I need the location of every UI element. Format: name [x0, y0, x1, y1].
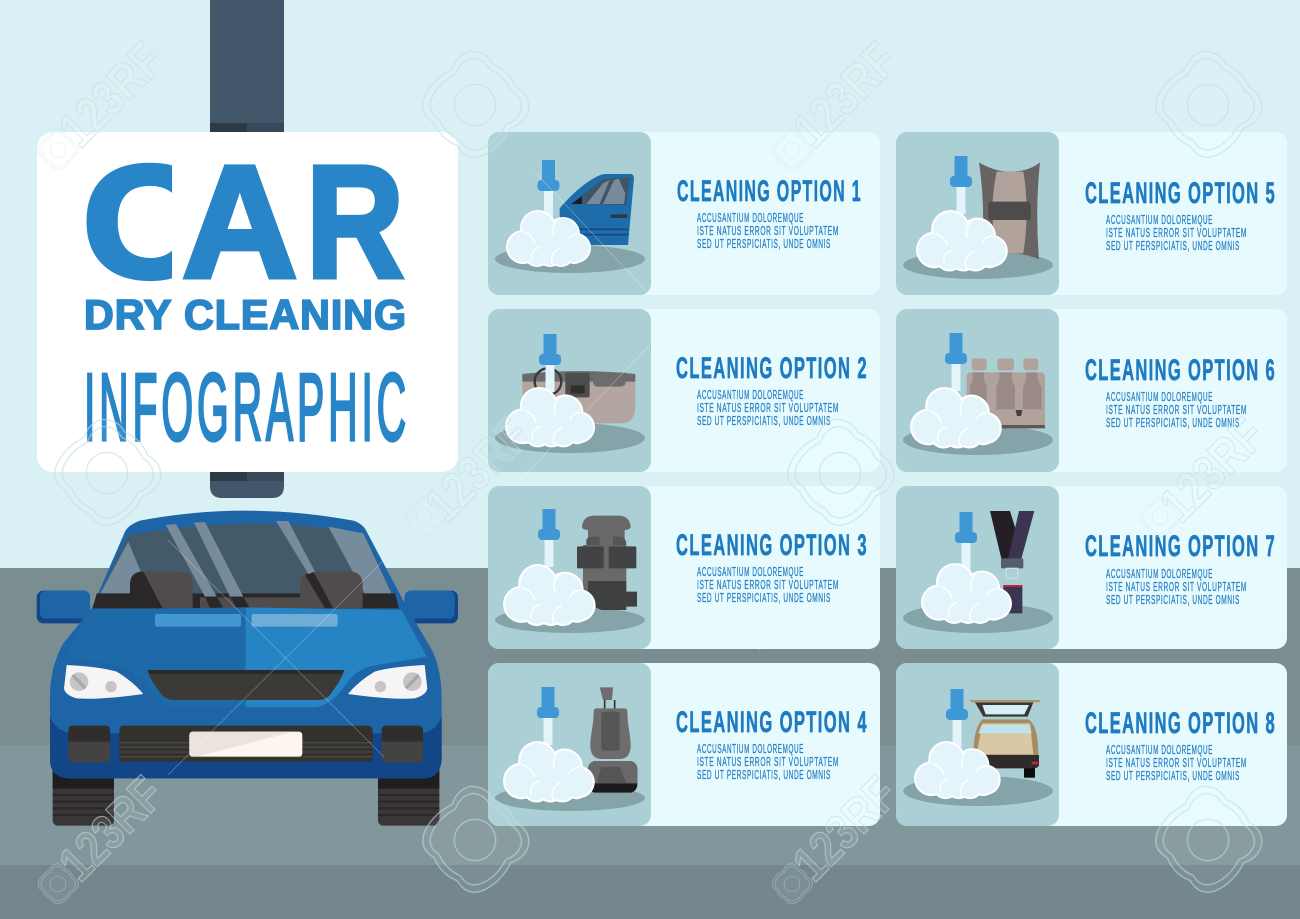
- body text: ACCUSANTIUM DOLOREMQUE: [697, 211, 804, 225]
- card: cleaning option 5: [896, 132, 1287, 295]
- body text: [697, 211, 839, 251]
- card: cleaning option 6: [896, 309, 1287, 472]
- icon: steam nozzle: [538, 160, 560, 218]
- body text: [1106, 390, 1247, 430]
- shadow: [903, 251, 1053, 279]
- subtitle: DRY CLEANING: DRY CLEANING: [84, 291, 407, 338]
- icon: seat parts: [577, 516, 637, 610]
- icon panel: [488, 132, 651, 295]
- shadow: [903, 776, 1053, 806]
- title: CAR: A: [182, 132, 298, 311]
- icon panel: [896, 132, 1059, 295]
- body text: SED UT PERSPICIATIS, UNDE OMNIS: [697, 768, 831, 782]
- card: cleaning option 3: [488, 486, 880, 649]
- body text: ACCUSANTIUM DOLOREMQUE: [697, 565, 804, 579]
- icon: rear seats: [967, 358, 1045, 428]
- heading: CLEANING OPTION 4: [676, 706, 868, 739]
- body text: SED UT PERSPICIATIS, UNDE OMNIS: [697, 591, 831, 605]
- icon panel: [488, 486, 651, 649]
- windshield: [93, 521, 399, 608]
- icon: foam cloud: [921, 563, 1012, 624]
- car front view: [37, 511, 458, 826]
- icon: open car trunk: [969, 700, 1041, 778]
- icon: foam cloud: [503, 564, 596, 626]
- watermark overlay: 123RF: [782, 32, 908, 158]
- body text: ISTE NATUS ERROR SIT VOLUPTATEM: [697, 401, 839, 415]
- icon: foam cloud: [914, 741, 1001, 799]
- grille: [148, 670, 344, 700]
- icon: dashboard: [522, 368, 635, 423]
- watermark overlay: 123RF: [782, 766, 908, 892]
- watermark overlay: 123RF: [414, 407, 540, 533]
- left mirror: [37, 591, 90, 623]
- shadow: [495, 245, 645, 273]
- icon: steam nozzle: [946, 689, 968, 747]
- hanging sign post: [210, 0, 284, 498]
- hood: [65, 607, 427, 707]
- card: cleaning option 8: [896, 663, 1287, 826]
- icon panel: [896, 663, 1059, 826]
- shadow: [903, 603, 1053, 633]
- icon: steam nozzle: [537, 687, 559, 745]
- body text: [697, 388, 839, 428]
- right fog lamp: [382, 726, 423, 762]
- title panel: [37, 132, 458, 472]
- body text: [1106, 213, 1247, 253]
- watermark overlay: 123RF: [1149, 407, 1275, 533]
- shadow: [495, 785, 645, 811]
- icon: steam nozzle: [538, 509, 560, 567]
- right headlight: [348, 665, 427, 699]
- heading: CLEANING OPTION 1: [677, 175, 862, 208]
- card: cleaning option 4: [488, 663, 880, 826]
- heading: CLEANING OPTION 2: [676, 352, 868, 385]
- lower grille: [119, 726, 373, 762]
- lower bumper: [50, 717, 442, 778]
- watermark overlay: 123RF: [48, 766, 174, 892]
- body text: ISTE NATUS ERROR SIT VOLUPTATEM: [697, 224, 839, 238]
- icon: steam nozzle: [955, 512, 977, 570]
- right mirror: [405, 591, 458, 623]
- title: CAR: C: [82, 132, 210, 311]
- title: CAR: [86, 162, 405, 282]
- body text: [697, 742, 839, 782]
- icon panel: [488, 663, 651, 826]
- car body: [50, 511, 442, 778]
- garage floor: [0, 568, 1300, 919]
- body text: ACCUSANTIUM DOLOREMQUE: [697, 388, 804, 402]
- card: cleaning option 7: [896, 486, 1287, 649]
- icon: seat belt: [990, 511, 1034, 613]
- left tire: [53, 763, 114, 826]
- body text: [1106, 567, 1247, 607]
- shadow: [495, 607, 645, 633]
- text: INFOGRAPHIC: [84, 354, 410, 461]
- title: CAR: R: [306, 132, 404, 311]
- watermark overlay: 123RF: [48, 32, 174, 158]
- card: cleaning option 1: [488, 132, 880, 295]
- body text: SED UT PERSPICIATIS, UNDE OMNIS: [697, 414, 831, 428]
- right tire: [378, 763, 439, 826]
- shadow: [903, 425, 1053, 455]
- icon: foam cloud: [910, 387, 1002, 449]
- body text: SED UT PERSPICIATIS, UNDE OMNIS: [697, 237, 831, 251]
- icon: foam cloud: [506, 210, 591, 267]
- icon: foam cloud: [505, 387, 595, 447]
- icon panel: [896, 309, 1059, 472]
- icon: foam cloud: [503, 741, 595, 803]
- body text: ISTE NATUS ERROR SIT VOLUPTATEM: [697, 755, 839, 769]
- icon: seat back: [979, 162, 1040, 259]
- body text: ISTE NATUS ERROR SIT VOLUPTATEM: [697, 578, 839, 592]
- icon: steam nozzle: [950, 156, 972, 214]
- icon: foam cloud: [916, 210, 1008, 272]
- left headlight: [64, 665, 143, 699]
- body text: [1106, 743, 1247, 783]
- shadow: [495, 423, 645, 453]
- icon: steam nozzle: [945, 333, 967, 391]
- icon panel: [488, 309, 651, 472]
- body text: [697, 565, 839, 605]
- icon: steam nozzle: [539, 334, 561, 392]
- heading: CLEANING OPTION 3: [676, 529, 868, 562]
- icon panel: [896, 486, 1059, 649]
- license plate: [189, 732, 302, 757]
- background wall: [0, 0, 1300, 568]
- icon: car door: [560, 174, 634, 245]
- left fog lamp: [68, 726, 110, 762]
- card: cleaning option 2: [488, 309, 880, 472]
- icon: car seat: [588, 687, 637, 793]
- body text: ACCUSANTIUM DOLOREMQUE: [697, 742, 804, 756]
